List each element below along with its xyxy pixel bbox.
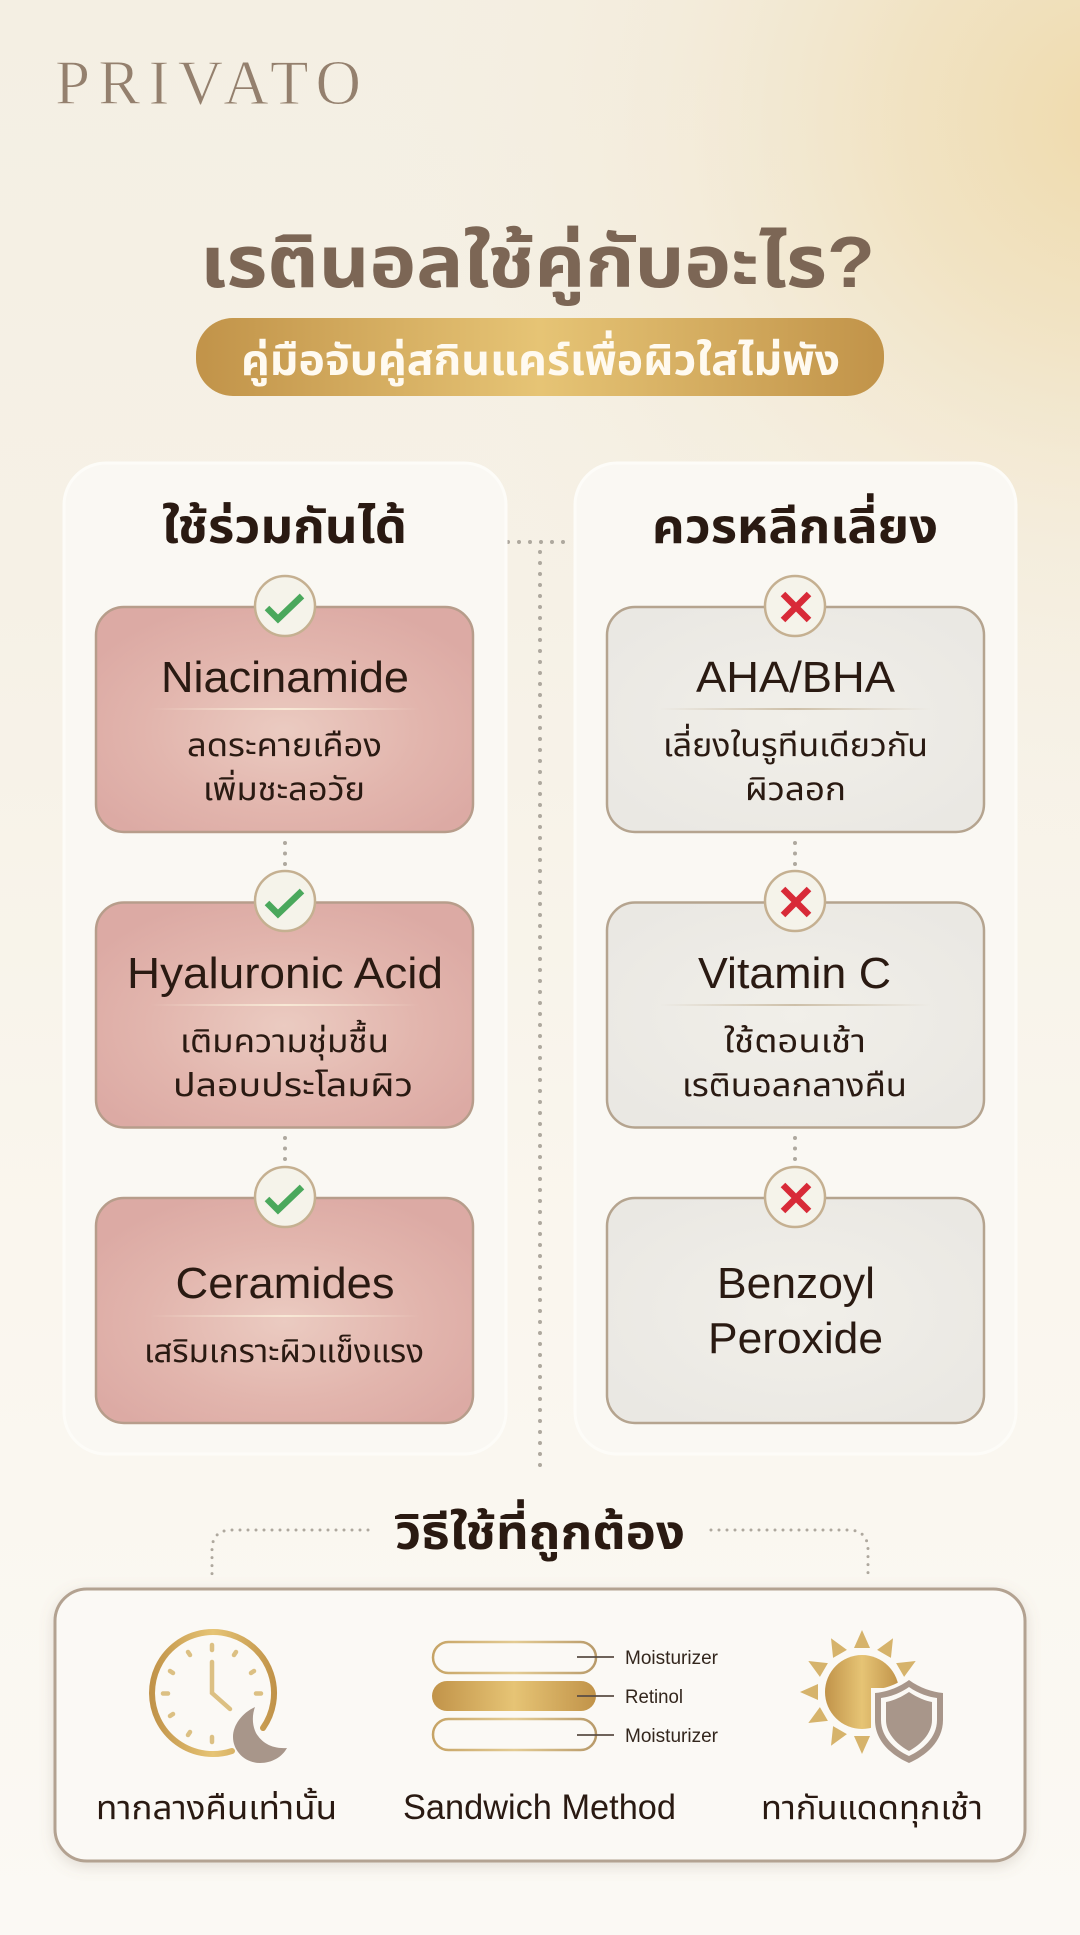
label: night only: ทากลางคืนเท่านั้น <box>96 1787 337 1826</box>
heading: avoid: ควรหลีกเลี่ยง <box>652 493 938 554</box>
card: Benzoyl Peroxide: Benzoyl <box>717 1259 875 1308</box>
card: AHA/BHA: เลี่ยงในรูทีนเดียวกัน <box>663 723 928 765</box>
icon: clock and moon <box>152 1632 287 1763</box>
icon: sandwich method layers: Moisturizer <box>625 1648 719 1669</box>
card: Vitamin C <box>607 871 984 1128</box>
panel: avoid <box>575 463 1016 1454</box>
card: Hyaluronic Acid <box>96 871 473 1128</box>
card: Vitamin C: เรตินอลกลางคืน <box>682 1067 907 1103</box>
dotted connector between panels <box>508 542 574 1476</box>
card: Hyaluronic Acid: เติมความชุ่มชื้น <box>180 1019 389 1060</box>
card: Niacinamide: เพิ่มชะลอวัย <box>203 769 365 807</box>
icon: sandwich method layers: Retinol <box>625 1687 683 1708</box>
dotted brackets <box>212 1530 868 1578</box>
icon: cross <box>765 871 825 931</box>
card: Vitamin C: Vitamin C <box>698 949 891 998</box>
card: Ceramides: Ceramides <box>176 1259 394 1308</box>
card: Niacinamide: Niacinamide <box>161 653 409 702</box>
card: Niacinamide <box>96 576 473 832</box>
card: Hyaluronic Acid: ปลอบประโลมผิว <box>173 1067 413 1103</box>
card: Niacinamide: ลดระคายเคือง <box>187 727 382 763</box>
card: AHA/BHA: AHA/BHA <box>696 653 896 702</box>
icon: sandwich method layers: Moisturizer <box>625 1726 719 1747</box>
connector dots <box>283 843 287 1165</box>
card: Benzoyl Peroxide: Peroxide <box>708 1314 883 1363</box>
icon: cross <box>765 576 825 636</box>
label: sunscreen every morning: ทากันแดดทุกเช้า <box>761 1789 983 1828</box>
heading: correct usage: วิธีใช้ที่ถูกต้อง <box>395 1499 685 1562</box>
panel: use together <box>64 463 506 1454</box>
card: AHA/BHA <box>607 576 984 832</box>
subtitle pill <box>196 318 884 396</box>
icon: sandwich method layers <box>432 1642 719 1750</box>
icon: sun and shield <box>800 1630 943 1763</box>
heading: use together: ใช้ร่วมกันได้ <box>162 501 407 554</box>
icon: check <box>255 1167 315 1227</box>
card: Hyaluronic Acid: Hyaluronic Acid <box>127 949 443 998</box>
card: Vitamin C: ใช้ตอนเช้า <box>724 1023 866 1059</box>
label: sandwich method: Sandwich Method <box>403 1788 676 1827</box>
icon: check <box>255 871 315 931</box>
brand logo: PRIVATO: PRIVATO <box>55 48 361 118</box>
card: Ceramides <box>96 1167 473 1423</box>
icon: cross <box>765 1167 825 1227</box>
card: Benzoyl Peroxide <box>607 1167 984 1423</box>
card: Ceramides: เสริมเกราะผิวแข็งแรง <box>144 1333 424 1369</box>
connector dots <box>793 843 797 1165</box>
card: AHA/BHA: ผิวลอก <box>745 771 846 807</box>
icon: check <box>255 576 315 636</box>
subtitle pill: คู่มือจับคู่สกินแคร์เพื่อผิวใสไม่พัง <box>241 330 840 386</box>
title: เรตินอลใช้คู่กับอะไร? <box>200 223 875 306</box>
panel: usage <box>55 1589 1025 1861</box>
